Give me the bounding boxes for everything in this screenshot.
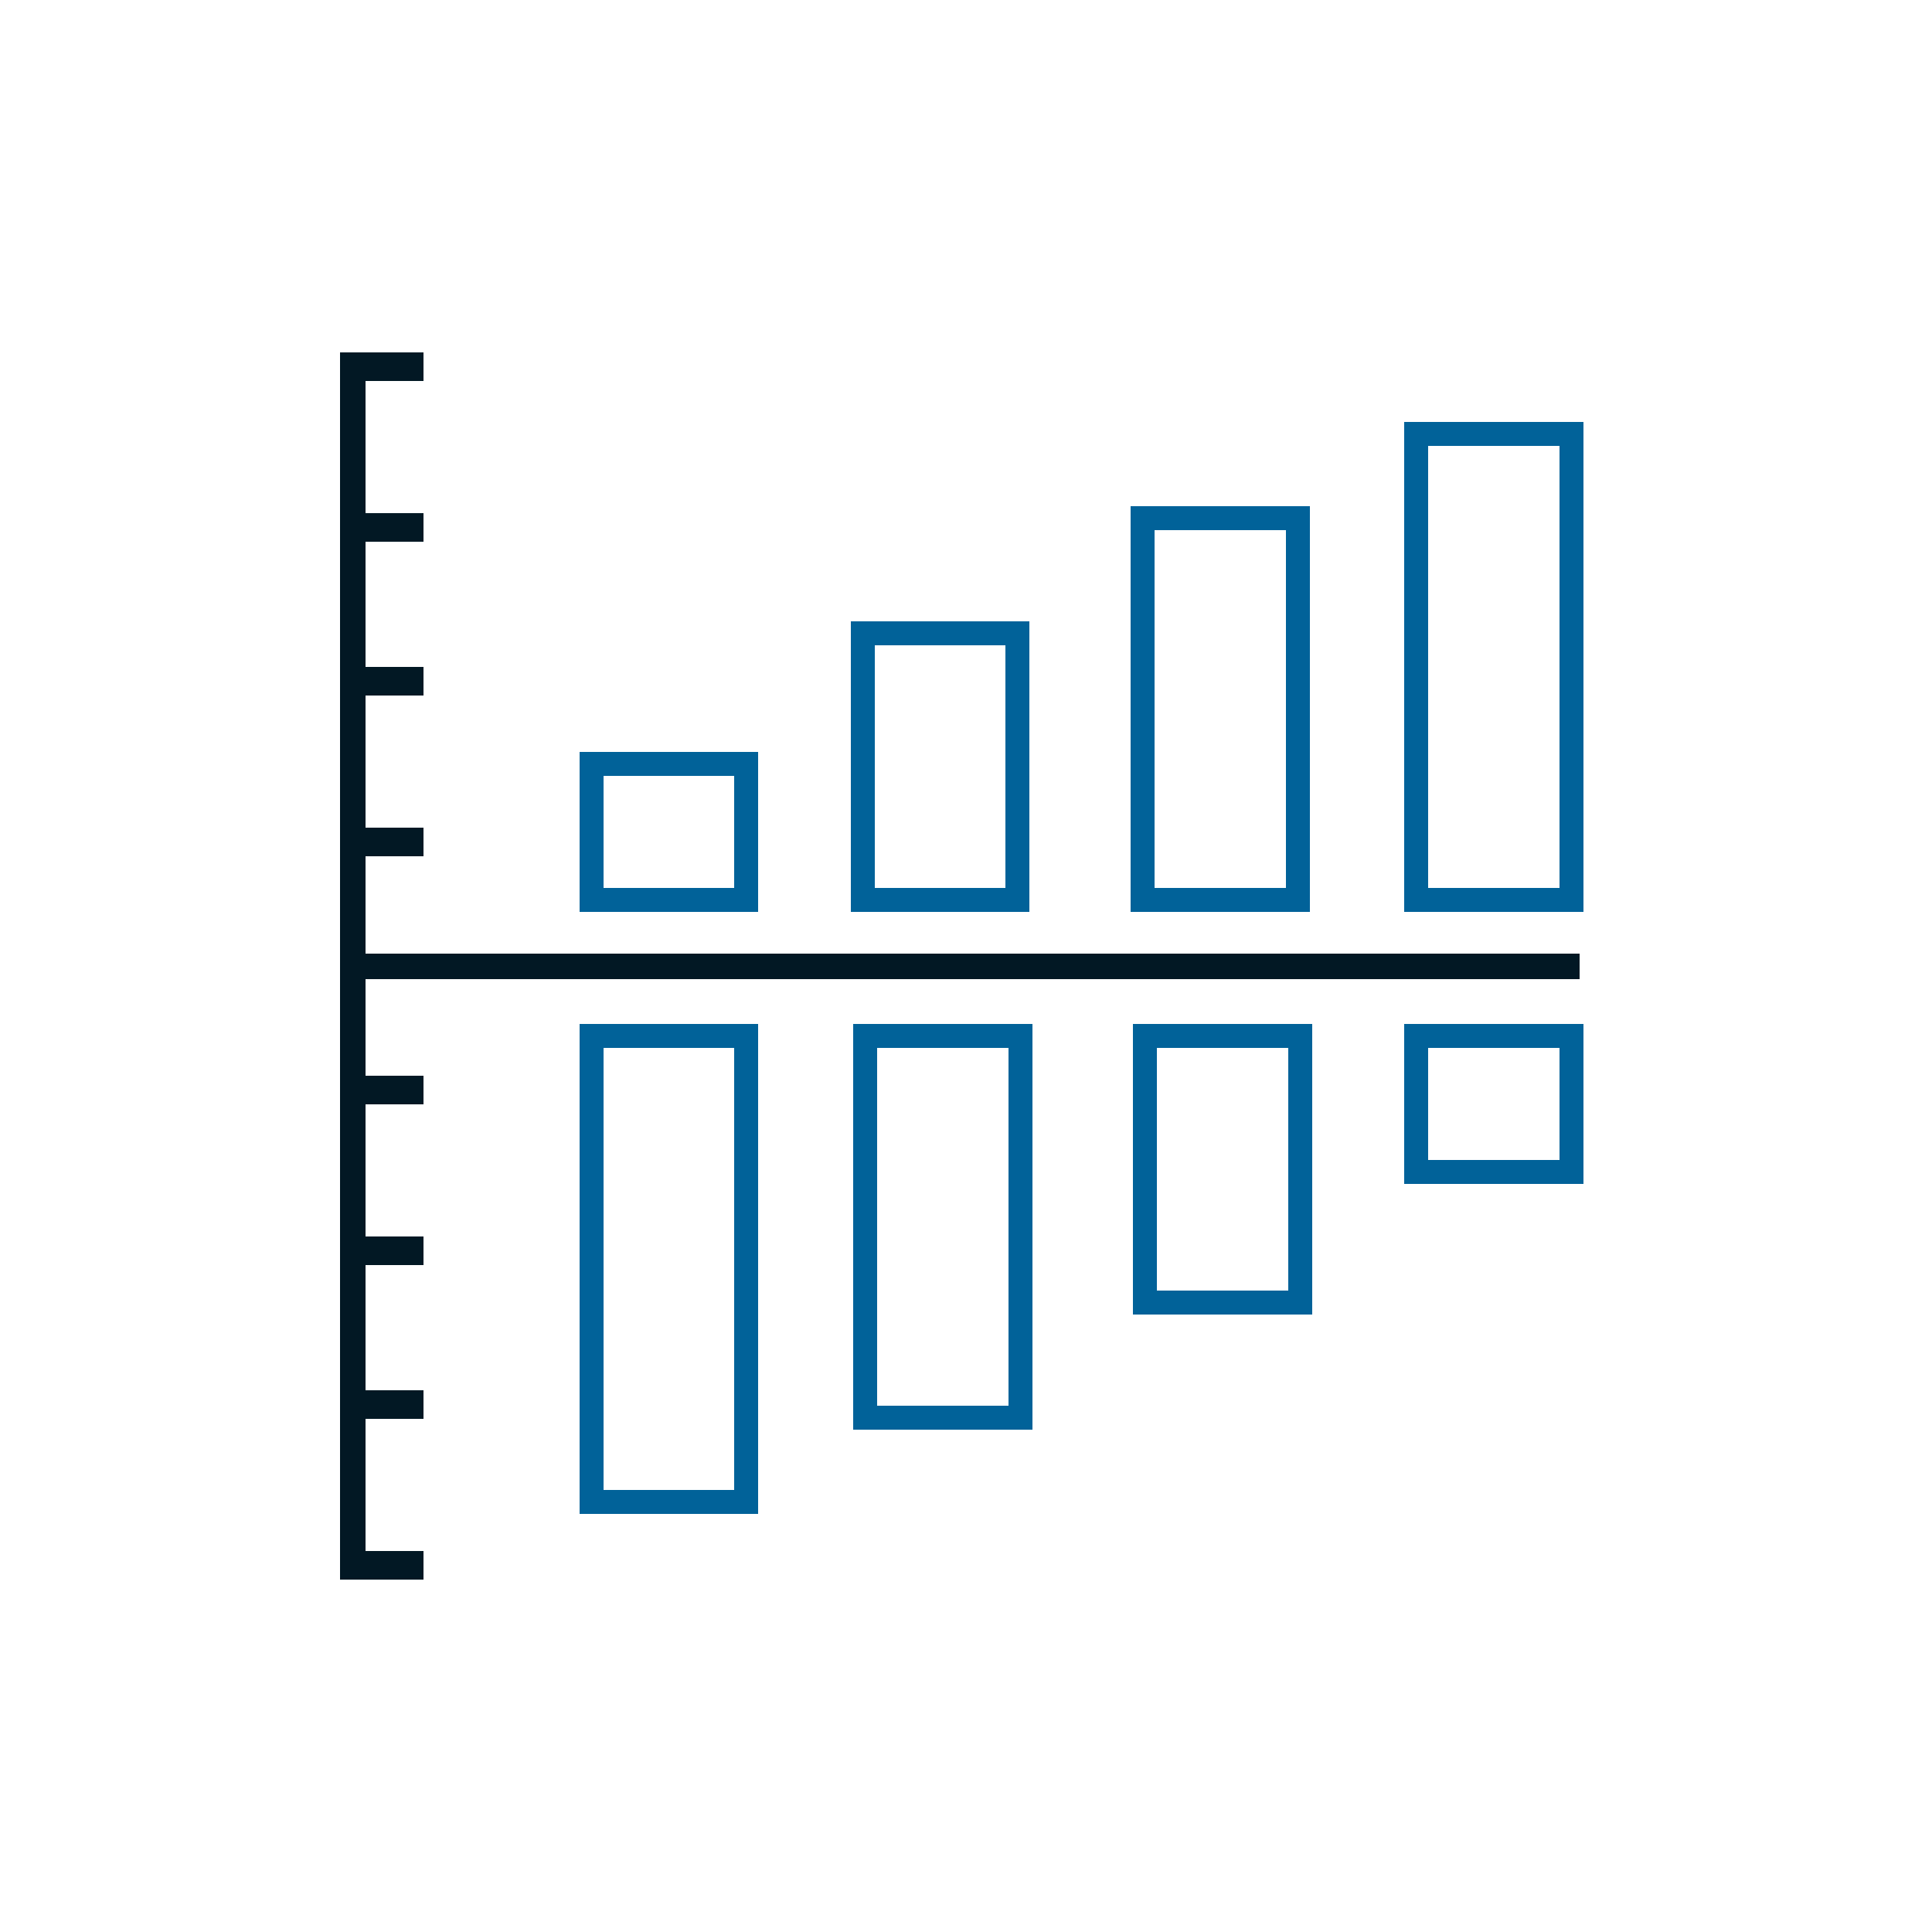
upper bars [592, 434, 1572, 900]
lower bar 1 [592, 1036, 747, 1502]
upper bar 1 [592, 764, 747, 900]
upper bar 3 [1142, 518, 1298, 900]
lower bar 3 [1145, 1036, 1300, 1303]
lower bar 2 [866, 1036, 1020, 1417]
lower bars [592, 1036, 1572, 1502]
upper bar 4 [1416, 434, 1572, 900]
vertical axis with tick marks [340, 352, 423, 1580]
lower bar 4 [1416, 1036, 1572, 1172]
upper bar 2 [862, 634, 1017, 900]
horizontal baseline [340, 954, 1580, 979]
